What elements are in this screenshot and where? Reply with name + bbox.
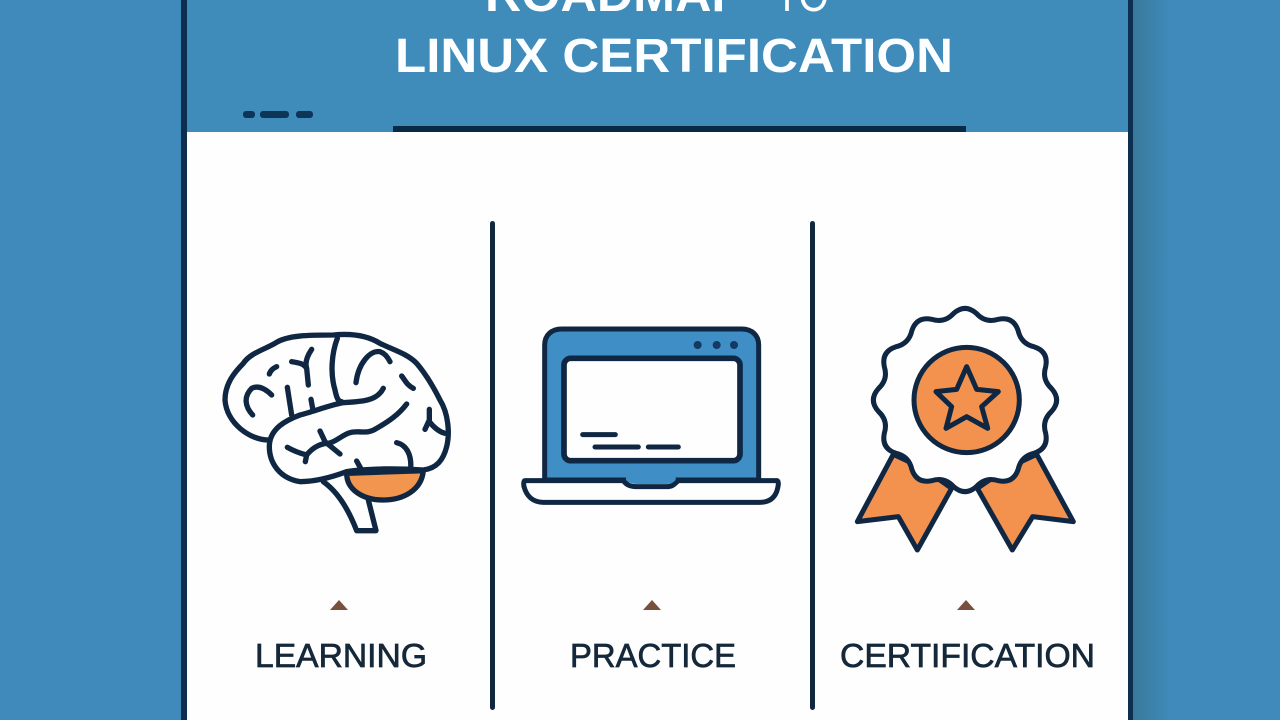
- column divider: left: [490, 221, 495, 710]
- label: practice: PRACTICE: [570, 637, 736, 674]
- column divider: right: [810, 221, 815, 710]
- title: [395, 0, 953, 83]
- icon: brain: [225, 334, 448, 531]
- panel: header: [187, 0, 1128, 132]
- header dashes: [243, 111, 313, 118]
- header underline: [393, 126, 966, 132]
- marker: certification: [957, 600, 975, 610]
- medal rosette: [873, 308, 1057, 492]
- ribbon: right: [977, 454, 1073, 550]
- title: LINUX CERTIFICATION: [395, 30, 953, 83]
- label: learning: LEARNING: [255, 637, 427, 674]
- icon: certification medal: [857, 308, 1073, 550]
- icon: laptop: [524, 329, 778, 502]
- panel: roadmap card: [181, 0, 1133, 720]
- marker: learning: [330, 600, 348, 610]
- label: certification: CERTIFICATION: [840, 637, 1095, 674]
- ribbon: left: [857, 454, 952, 550]
- marker: practice: [643, 600, 661, 610]
